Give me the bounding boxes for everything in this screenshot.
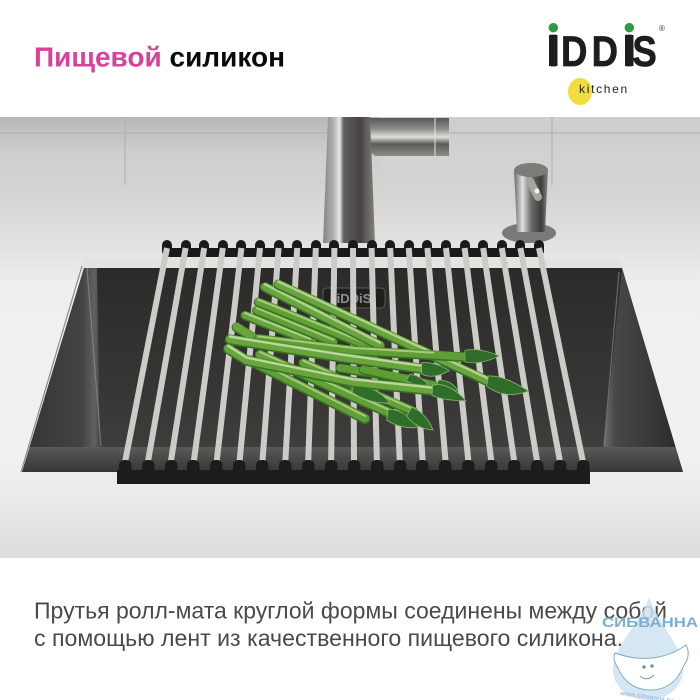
long front stem <box>230 337 423 369</box>
corner seams <box>87 268 619 446</box>
top silicone strip <box>162 240 544 257</box>
worktop <box>0 198 700 558</box>
sink rim <box>80 258 624 268</box>
metal rods <box>125 248 583 462</box>
bath face <box>640 665 654 679</box>
logo: iddis kitchen <box>548 23 665 105</box>
tile grout lines <box>0 117 700 185</box>
bath <box>614 645 688 690</box>
lowest front stem <box>228 346 433 391</box>
caption <box>34 598 667 651</box>
asparagus <box>228 282 528 430</box>
sub-brand: kitchen <box>579 82 629 96</box>
front stem tip <box>422 363 449 376</box>
green i dots <box>549 23 634 32</box>
lowest stem tip <box>432 385 466 401</box>
top right tip <box>465 350 499 363</box>
yellow spot <box>568 78 592 105</box>
soap dispenser button <box>530 181 540 197</box>
faucet spout <box>354 118 449 156</box>
sink right wall <box>604 268 676 447</box>
soap dispenser body <box>514 170 548 232</box>
bottom silicone strip <box>117 460 590 484</box>
middle stem <box>258 336 467 357</box>
soap dispenser top <box>514 163 548 177</box>
heading: Пищевой силикон <box>34 42 285 72</box>
watermark: sibvanna <box>602 597 698 700</box>
embossed sink logo: iDDiS <box>337 291 372 306</box>
brand wordmark: iDDiS <box>548 28 657 76</box>
water drop <box>613 597 683 700</box>
tile wall <box>0 117 700 202</box>
right long tip <box>487 376 528 395</box>
sink floor band <box>22 447 683 472</box>
sink left edge <box>21 266 82 472</box>
watermark name: СИБВАННА <box>602 614 698 630</box>
wall highlight <box>380 117 700 202</box>
letter i stems <box>549 35 634 66</box>
faucet spout ring <box>434 118 436 156</box>
sink back wall <box>22 268 683 472</box>
caption line 2: с помощью лент из качественного пищевого силикона. <box>34 625 623 651</box>
cut stem <box>250 358 365 419</box>
soap plate <box>502 223 556 243</box>
photo: sink with roll mat <box>0 117 700 558</box>
back stems <box>260 352 447 413</box>
embossed sink logo <box>323 288 385 308</box>
faucet body <box>323 117 375 243</box>
registered mark: ® <box>659 24 665 33</box>
back tips <box>352 374 458 430</box>
caption line 1: Прутья ролл-мата круглой формы соединены между собой <box>34 598 667 624</box>
sink left wall <box>30 268 100 447</box>
upper stems <box>237 282 490 382</box>
